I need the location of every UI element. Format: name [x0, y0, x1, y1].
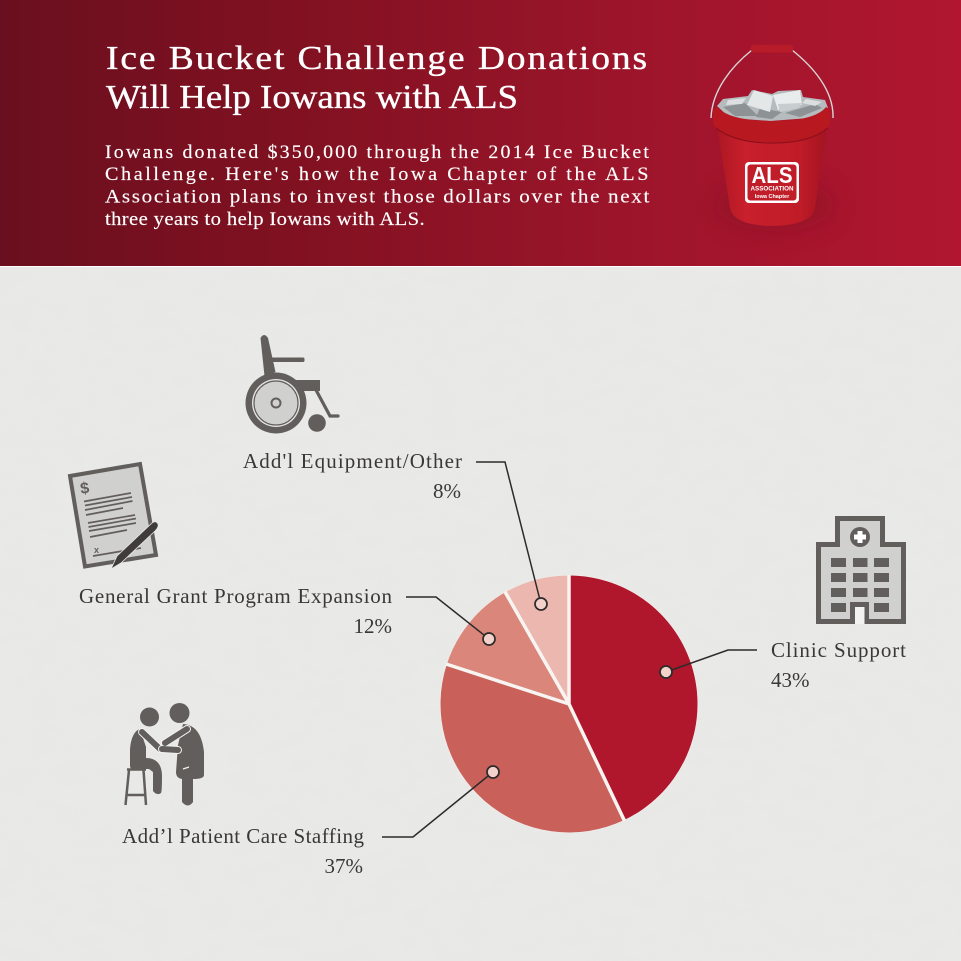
logo: ALS Association Iowa Chapter: ASSOCIATION — [750, 186, 794, 192]
slice: Add'l Patient Care Staffing 37% — [441, 664, 624, 833]
icon: grant document with pen — [70, 464, 158, 569]
connector: General Grant Program Expansion — [406, 597, 495, 645]
pie chart — [440, 575, 698, 833]
title: Will Help Iowans with ALS — [106, 79, 518, 116]
title: Ice Bucket Challenge Donations — [106, 40, 649, 77]
icon: ice bucket with ALS logo — [711, 45, 835, 231]
intro text: Iowans donated $350,000 through the 2014 Ice Bucket — [105, 143, 651, 163]
label: Add'l Equipment/Other 8%: 8% — [433, 479, 461, 503]
label: Add'l Equipment/Other 8%: Add'l Equipment/Other — [243, 449, 462, 473]
label: Clinic Support 43%: 43% — [771, 668, 810, 692]
label: Clinic Support 43%: Clinic Support — [771, 638, 906, 662]
icon: caregiver and patient — [126, 703, 204, 806]
slice: Add'l Equipment/Other 8% — [505, 575, 569, 704]
intro text: three years to help Iowans with ALS. — [105, 210, 425, 230]
connector: Add'l Patient Care Staffing — [382, 766, 499, 837]
slice: General Grant Program Expansion 12% — [447, 592, 569, 704]
intro text — [105, 143, 651, 230]
intro text: Challenge. Here's how the Iowa Chapter of the ALS — [105, 165, 651, 185]
logo: ALS Association Iowa Chapter: Iowa Chapter — [755, 194, 790, 200]
background: paper — [0, 266, 961, 961]
icon: hospital — [818, 518, 904, 624]
icon: wheelchair — [246, 335, 338, 434]
label: General Grant Program Expansion 12%: 12% — [354, 614, 392, 638]
label: Clinic Support 43% — [771, 638, 906, 692]
label: Add'l Equipment/Other 8% — [243, 449, 462, 503]
connector: Add'l Equipment/Other — [476, 462, 547, 610]
icon: grant document with pen: $ — [79, 480, 90, 498]
label: General Grant Program Expansion 12%: General Grant Program Expansion — [79, 584, 392, 608]
connector: Clinic Support — [660, 650, 757, 678]
label: General Grant Program Expansion 12% — [79, 584, 392, 638]
logo: ALS Association Iowa Chapter — [745, 162, 799, 203]
title — [106, 40, 649, 116]
header banner — [0, 0, 961, 267]
intro text: Association plans to invest those dollars over the next — [105, 188, 651, 208]
label: Add'l Patient Care Staffing 37%: 37% — [324, 854, 363, 878]
icon: grant document with pen: x — [94, 545, 99, 555]
label: Add'l Patient Care Staffing 37% — [122, 824, 364, 878]
logo: ALS Association Iowa Chapter: ALS — [752, 162, 792, 188]
slice: Clinic Support 43% — [569, 576, 698, 820]
label: Add'l Patient Care Staffing 37%: Add’l Patient Care Staffing — [122, 824, 364, 848]
